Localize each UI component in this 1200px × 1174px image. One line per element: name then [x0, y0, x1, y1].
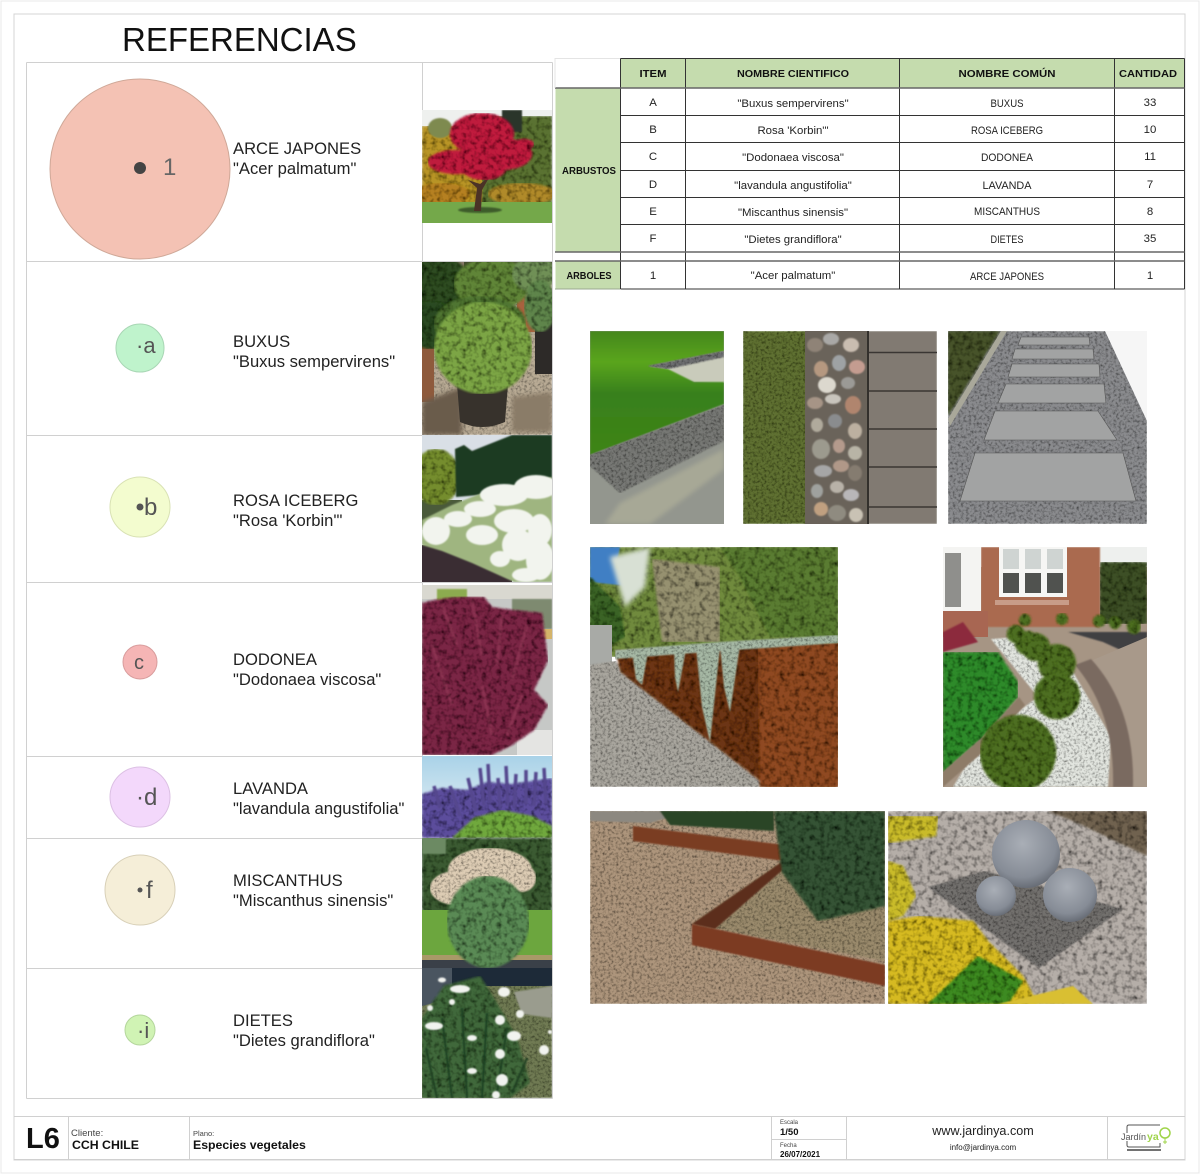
row E: 8 — [1147, 206, 1153, 218]
symbol: b: b — [144, 494, 157, 521]
photo: dietes flowers — [422, 968, 552, 1098]
group cell: arboles — [556, 261, 620, 289]
table header: ITEM — [640, 68, 667, 80]
logo: ya — [1147, 1131, 1159, 1143]
label: rosa iceberg: "Rosa 'Korbin'" — [233, 511, 343, 530]
row D: D — [649, 179, 657, 191]
client: Cliente: — [71, 1128, 103, 1139]
label: dodonea: "Dodonaea viscosa" — [233, 670, 381, 689]
group cell: arbustos: ARBUSTOS — [562, 165, 616, 177]
symbol: a: ·a — [136, 333, 156, 358]
photo: corten wall — [590, 547, 838, 787]
photo: dodonaea shrub — [422, 585, 552, 755]
symbol: i — [125, 1015, 155, 1045]
table header: NOMBRE CIENTIFICO — [737, 68, 849, 80]
row D: "lavandula angustifolia" — [734, 180, 852, 192]
row 1: "Acer palmatum" — [751, 270, 835, 282]
logo — [1121, 1125, 1170, 1150]
symbol: d: ·d — [136, 784, 157, 811]
photo: granite spheres — [888, 811, 1147, 1004]
legend row: buxus — [116, 256, 556, 435]
date: Fecha — [780, 1143, 797, 1149]
table header fill — [620, 58, 1184, 88]
row E — [649, 206, 1153, 219]
symbol: f — [105, 855, 175, 925]
legend row: dodonea — [123, 585, 552, 755]
photo: acer tree — [422, 110, 552, 223]
client: CCH CHILE — [72, 1138, 139, 1152]
photo: buxus ball — [422, 262, 552, 435]
row F: DIETES — [990, 234, 1024, 246]
panel: quantities table — [555, 58, 1184, 289]
group cell: arbustos — [556, 88, 620, 252]
scale — [780, 1120, 799, 1138]
row 1 — [650, 270, 1153, 283]
website and email: info@jardinya.com — [950, 1143, 1017, 1152]
symbol: d — [110, 767, 170, 827]
legend row: arce japones — [50, 79, 556, 259]
row D: 7 — [1147, 179, 1153, 191]
scale: Escala — [780, 1120, 799, 1126]
row D — [649, 179, 1153, 192]
row 1: 1 — [1147, 270, 1153, 282]
row F: "Dietes grandiflora" — [744, 234, 842, 246]
row E: MISCANTHUS — [974, 206, 1040, 218]
legend grid — [26, 62, 552, 1098]
label: dietes: DIETES — [233, 1011, 293, 1030]
row B — [649, 124, 1156, 137]
symbol: c — [123, 645, 157, 679]
label: arce japones: "Acer palmatum" — [233, 159, 356, 178]
label: buxus: BUXUS — [233, 332, 290, 351]
symbol: f: f — [146, 877, 153, 904]
row B: Rosa 'Korbin'" — [757, 125, 829, 137]
table grid — [620, 58, 1184, 289]
client — [71, 1128, 139, 1152]
row C: DODONEA — [981, 152, 1033, 164]
label: miscanthus: MISCANTHUS — [233, 871, 343, 890]
row F — [650, 233, 1156, 246]
label: rosa iceberg: ROSA ICEBERG — [233, 491, 358, 510]
plan name: Plano: — [193, 1129, 214, 1138]
label: lavanda: "lavandula angustifolia" — [233, 799, 404, 818]
legend row: miscanthus — [105, 838, 552, 968]
row A: "Buxus sempervirens" — [737, 98, 849, 110]
label: lavanda: LAVANDA — [233, 779, 308, 798]
row D: LAVANDA — [982, 180, 1032, 192]
row 1: ARCE JAPONES — [970, 271, 1044, 283]
scale: 1/50 — [780, 1127, 798, 1138]
row A — [649, 97, 1156, 110]
label: dodonea: DODONEA — [233, 650, 317, 669]
panel: reference photos — [590, 331, 1147, 1004]
row B: ROSA ICEBERG — [971, 125, 1043, 137]
row 1: 1 — [650, 270, 656, 282]
legend row: rosa iceberg — [110, 435, 558, 582]
sheet number: L6 — [26, 1123, 60, 1155]
row B: B — [649, 124, 657, 136]
table header: NOMBRE COMÚN — [958, 67, 1056, 80]
photo: corten edging on gravel — [590, 811, 885, 1004]
plan name — [193, 1129, 306, 1152]
symbol: a — [116, 324, 164, 372]
table header — [640, 67, 1177, 80]
photo: boxwood garden — [943, 547, 1147, 787]
logo: Jardín — [1121, 1132, 1146, 1142]
symbol: tree 1: 1 — [163, 154, 176, 181]
website and email: www.jardinya.com — [931, 1124, 1034, 1138]
label: miscanthus: "Miscanthus sinensis" — [233, 891, 393, 910]
photo: grass, pebbles and decking — [743, 331, 937, 524]
symbol: c: c — [134, 652, 144, 674]
photo: white roses — [422, 435, 552, 582]
website and email — [931, 1124, 1034, 1152]
group cell: arboles: ARBOLES — [566, 270, 612, 282]
photo: lavender — [422, 756, 552, 838]
row A: 33 — [1144, 97, 1156, 109]
row A: BUXUS — [990, 98, 1024, 110]
table header: CANTIDAD — [1119, 68, 1177, 80]
plan name: Especies vegetales — [193, 1138, 306, 1152]
photo: lawn and gravel edge — [590, 331, 724, 524]
date: 26/07/2021 — [780, 1150, 821, 1159]
row B: 10 — [1144, 124, 1156, 136]
label: dietes: "Dietes grandiflora" — [233, 1031, 375, 1050]
row F: 35 — [1144, 233, 1156, 245]
photo: stepping stones path — [948, 331, 1147, 524]
photo: miscanthus — [422, 838, 552, 968]
symbol: tree 1 — [50, 79, 230, 259]
row C: C — [649, 151, 657, 163]
row A: A — [649, 97, 657, 109]
label: buxus: "Buxus sempervirens" — [233, 352, 395, 371]
panel: plant legend — [26, 62, 558, 1099]
row C: 11 — [1144, 151, 1156, 163]
row E: "Miscanthus sinensis" — [738, 207, 848, 219]
row C: "Dodonaea viscosa" — [742, 152, 844, 164]
symbol: b — [110, 477, 170, 537]
label: arce japones: ARCE JAPONES — [233, 139, 361, 158]
legend row: lavanda — [110, 756, 552, 838]
legend row: dietes — [125, 968, 552, 1099]
row F: F — [650, 233, 657, 245]
title: REFERENCIAS — [122, 21, 357, 58]
title block — [14, 1116, 1185, 1160]
date — [780, 1143, 821, 1159]
row E: E — [649, 206, 657, 218]
row C — [649, 151, 1156, 164]
symbol: i: ·i — [137, 1018, 149, 1043]
